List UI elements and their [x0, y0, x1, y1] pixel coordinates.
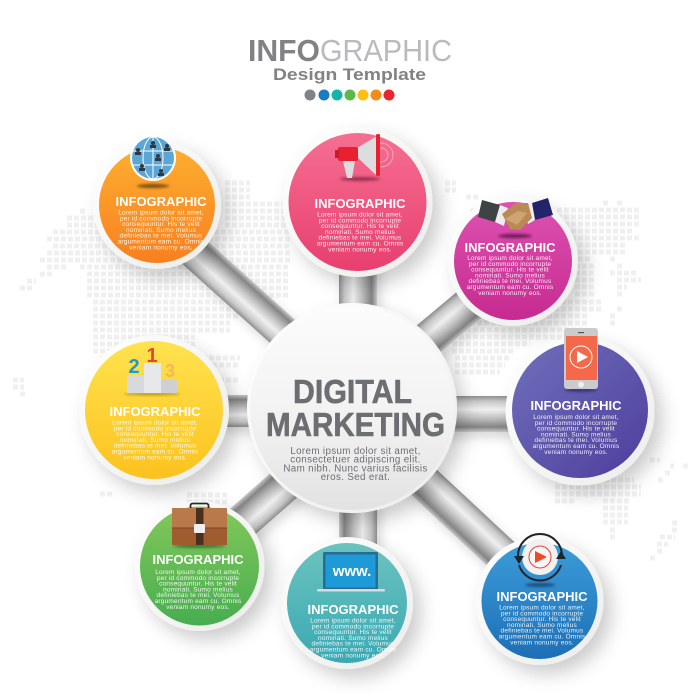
heading: green: INFOGRAPHIC	[152, 552, 244, 567]
text: pink: definiebas te mei. Volumus	[319, 235, 402, 242]
text: purple: consequuntur. His te velit	[537, 426, 615, 433]
panel: blue	[476, 534, 604, 665]
text: blue: nominati. Sumo melius	[507, 622, 578, 629]
text: green: definiebas te mei. Volumus	[157, 592, 240, 599]
subheading: Design Template	[273, 65, 426, 84]
heading: graphic: GRAPHIC	[320, 33, 452, 68]
text: orange: definiebas te mei. Volumus	[120, 233, 203, 240]
heading: yellow: INFOGRAPHIC	[110, 404, 201, 419]
text: pink: nominati. Sumo melius	[325, 229, 396, 236]
tube: teal	[339, 500, 377, 550]
text: purple: per id commodo incorrupte	[535, 420, 617, 427]
text: orange: argumentum eam cu. Omnis	[118, 238, 205, 246]
text: blue: veniam nonumy eos.	[510, 639, 574, 646]
heading: magenta: INFOGRAPHIC	[464, 240, 556, 255]
text: magenta: per id commodo incorrupte	[469, 261, 551, 268]
icon: handshake	[478, 198, 553, 230]
panel: green	[134, 501, 264, 631]
text: pink: Lorem ipsum dolor sit amet,	[317, 212, 403, 218]
tube: purple	[440, 396, 520, 432]
heading: purple: INFOGRAPHIC	[530, 398, 622, 413]
heading: digital: DIGITAL	[293, 373, 412, 410]
text: purple: Lorem ipsum dolor sit amet,	[533, 414, 619, 421]
colour dots	[304, 90, 394, 100]
text: green: argumentum eam cu. Omnis	[155, 598, 242, 605]
icon: podium: 3	[165, 361, 175, 381]
text: teal: argumentum eam cu. Omnis	[310, 646, 397, 654]
tube: blue	[388, 447, 537, 589]
text: yellow: nominati. Sumo melius	[120, 437, 191, 444]
text: blue: consequuntur. His te velit	[503, 616, 581, 623]
icon: megaphone	[335, 134, 393, 181]
text: yellow: argumentum eam cu. Omnis	[112, 448, 199, 456]
tube: magenta	[388, 272, 503, 377]
tube: orange	[143, 203, 321, 369]
text: orange: nominati. Sumo melius	[126, 227, 197, 234]
text: pink: consequuntur. His te velit	[321, 223, 399, 230]
text: yellow: Lorem ipsum dolor sit amet,	[112, 420, 198, 426]
panel: centre hub	[247, 303, 457, 513]
panel: orange	[93, 135, 221, 269]
icon: globe	[130, 135, 176, 181]
icon: laptop: www.	[332, 563, 371, 580]
icon: briefcase	[172, 504, 227, 548]
text: hub description: eros. Sed erat.	[321, 472, 390, 483]
tube: pink	[339, 260, 377, 320]
icon: play with arrows	[514, 534, 566, 580]
panel: teal	[281, 537, 413, 669]
heading: orange: INFOGRAPHIC	[116, 194, 207, 209]
text: yellow: veniam nonumy eos.	[123, 454, 187, 461]
icon: podium: 1	[146, 345, 158, 367]
dotted world map	[13, 183, 688, 558]
panel: yellow	[79, 335, 229, 485]
text: teal: nominati. Sumo melius	[318, 635, 389, 642]
text: teal: consequuntur. His te velit	[314, 629, 392, 636]
text: magenta: consequuntur. His te velit	[471, 267, 549, 274]
icon: podium: 2	[128, 356, 140, 378]
heading: marketing: MARKETING	[266, 406, 445, 443]
text: purple: argumentum eam cu. Omnis	[533, 443, 620, 450]
text: pink: veniam nonumy eos.	[328, 246, 392, 253]
text: blue: definiebas te mei. Volumus	[501, 628, 584, 635]
text: magenta: argumentum eam cu. Omnis	[467, 284, 554, 291]
text: green: nominati. Sumo melius	[163, 586, 234, 593]
text: teal: veniam nonumy eos.	[321, 652, 385, 659]
text: teal: per id commodo incorrupte	[312, 623, 394, 630]
panel: purple	[506, 328, 654, 486]
text: hub description: Lorem ipsum dolor sit amet,	[290, 446, 421, 457]
text: pink: argumentum eam cu. Omnis	[317, 240, 404, 248]
heading: teal: INFOGRAPHIC	[308, 602, 399, 617]
text: orange: per id commodo incorrupte	[120, 215, 202, 222]
heading: blue: INFOGRAPHIC	[496, 589, 588, 604]
text: teal: Lorem ipsum dolor sit amet,	[310, 618, 396, 624]
text: blue: argumentum eam cu. Omnis	[499, 634, 586, 640]
text: yellow: per id commodo incorrupte	[114, 425, 196, 432]
heading: pink: INFOGRAPHIC	[314, 196, 406, 211]
text: green: consequuntur. His te velit	[159, 581, 237, 588]
icon: podium	[124, 345, 180, 396]
text: orange: Lorem ipsum dolor sit amet,	[118, 210, 204, 216]
text: yellow: consequuntur. His te velit	[116, 431, 194, 438]
text: magenta: Lorem ipsum dolor sit amet,	[467, 255, 553, 262]
text: green: Lorem ipsum dolor sit amet,	[155, 569, 241, 576]
text: blue: Lorem ipsum dolor sit amet,	[499, 604, 585, 612]
text: teal: definiebas te mei. Volumus	[312, 641, 395, 648]
text: green: veniam nonumy eos.	[166, 604, 230, 611]
text: magenta: nominati. Sumo melius	[475, 272, 546, 279]
text: pink: per id commodo incorrupte	[319, 217, 401, 224]
text: magenta: veniam nonumy eos.	[478, 290, 542, 297]
text: hub description: Nam nibh. Nunc varius facilisis	[283, 463, 428, 474]
panel: pink	[282, 127, 432, 277]
panel: magenta	[448, 196, 578, 326]
text: blue: per id commodo incorrupte	[501, 610, 583, 617]
text: yellow: definiebas te mei. Volumus	[114, 443, 197, 450]
connector tubes	[143, 203, 537, 589]
text: orange: veniam nonumy eos.	[129, 244, 193, 251]
text: hub description: consectetuer adipiscing elit.	[290, 455, 421, 466]
text: purple: nominati. Sumo melius	[541, 431, 612, 438]
text: magenta: definiebas te mei. Volumus	[469, 278, 552, 285]
heading: infographic: INFO	[248, 33, 320, 68]
tube: green	[202, 457, 312, 561]
text: green: per id commodo incorrupte	[157, 575, 239, 582]
text: orange: consequuntur. His te velit	[122, 221, 200, 228]
tube: yellow	[220, 395, 260, 427]
text: purple: definiebas te mei. Volumus	[535, 437, 618, 444]
text: purple: veniam nonumy eos.	[544, 449, 608, 456]
title	[248, 33, 452, 100]
icon: phone	[564, 328, 598, 392]
